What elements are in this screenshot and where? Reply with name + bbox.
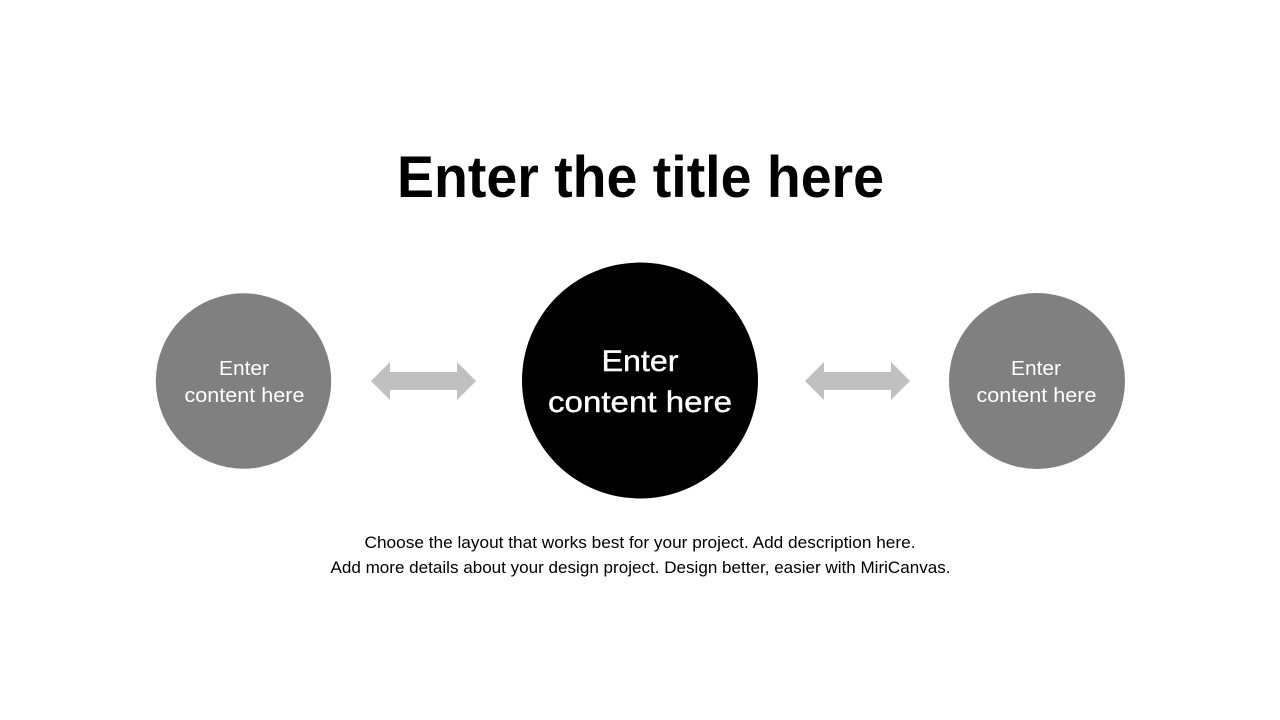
left circle node: Enter	[219, 357, 269, 380]
right circle node: Enter	[1011, 357, 1061, 380]
right circle node	[949, 293, 1125, 469]
description text: Choose the layout that works best for your project. Add description here.	[364, 534, 916, 552]
center circle node	[522, 262, 758, 498]
arrow: right double-headed	[805, 362, 910, 400]
description text: Add more details about your design project. Design better, easier with MiriCanvas.	[330, 559, 950, 577]
description text	[330, 534, 950, 577]
left circle node: content here	[184, 384, 304, 407]
center circle node: Enter	[602, 345, 678, 378]
left circle node	[156, 293, 331, 469]
arrow: left double-headed	[371, 362, 476, 400]
center circle node: content here	[548, 386, 732, 419]
right circle node: content here	[976, 384, 1096, 407]
title: Enter the title here	[397, 145, 884, 210]
